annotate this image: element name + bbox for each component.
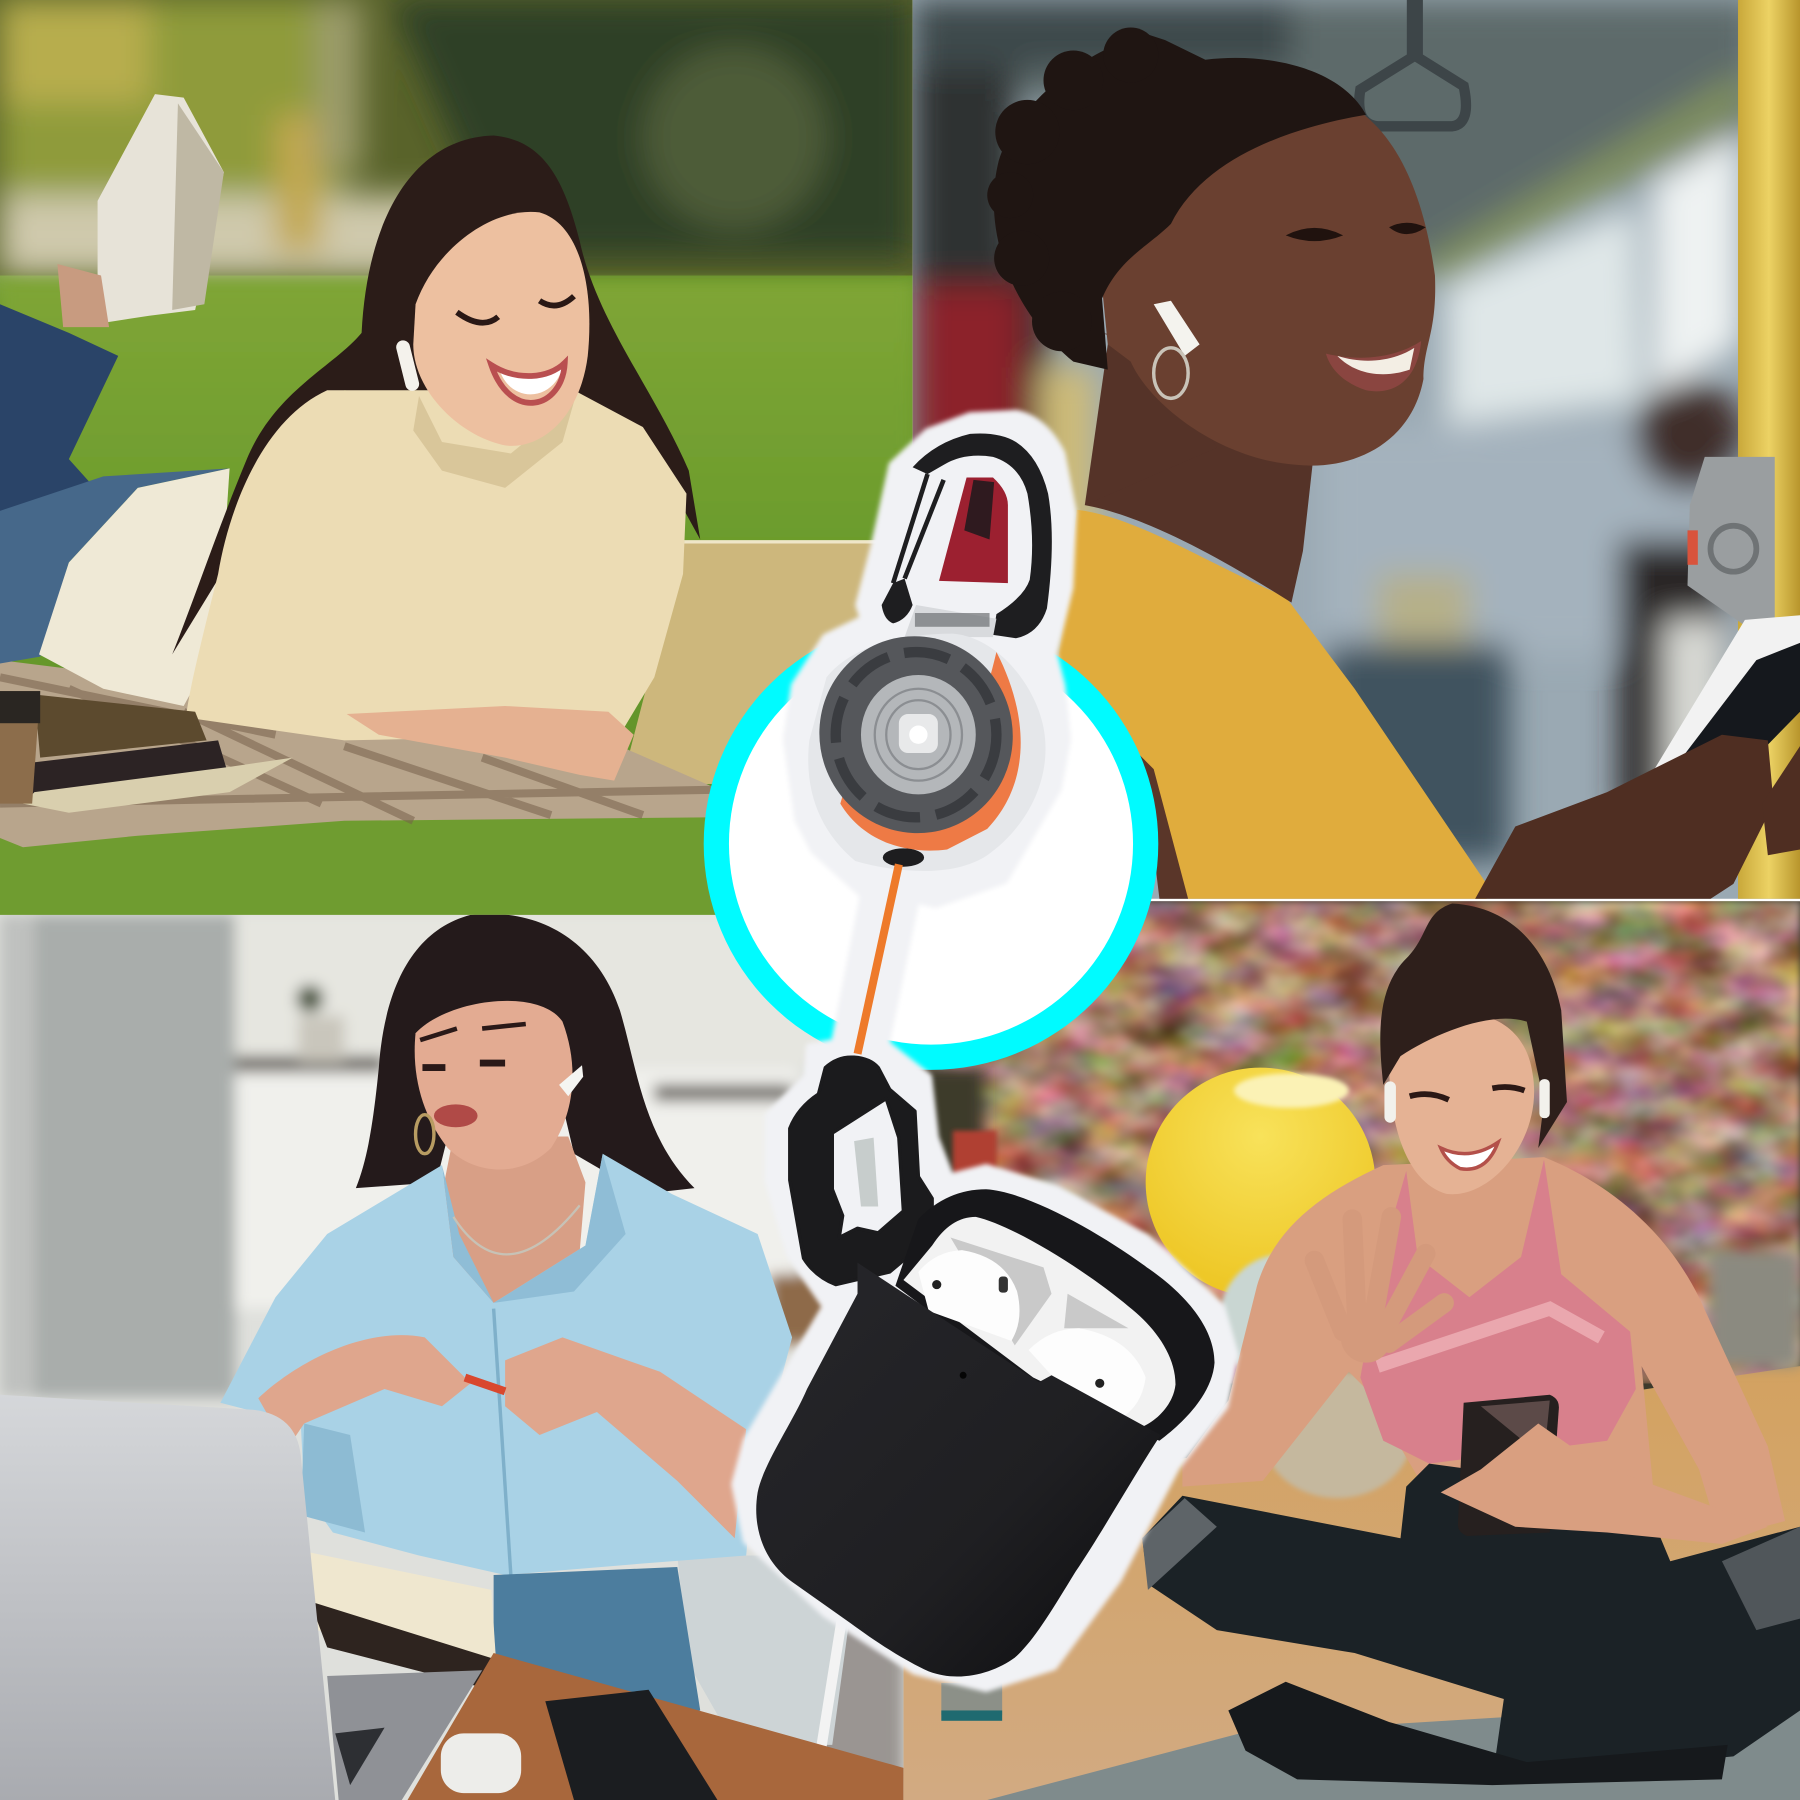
forearms and hands: [258, 1335, 470, 1436]
earbud right: [1029, 1328, 1146, 1415]
hand and phone: [1655, 615, 1800, 768]
laptop: [621, 542, 884, 785]
loop opening: [854, 1138, 878, 1207]
panel: woman in blue shirt at desk: [0, 914, 903, 1800]
blanket: [0, 660, 712, 847]
hair: [172, 135, 700, 654]
earbuds: [1384, 1081, 1396, 1123]
holding hand: [1441, 1423, 1768, 1544]
yellow top: [1056, 510, 1487, 899]
blue shirt: [220, 1154, 792, 1575]
yellow exercise ball: [1146, 1068, 1375, 1297]
neck and chest: [1085, 333, 1314, 603]
AirPods case: [756, 1189, 1215, 1677]
open notebook: [308, 1552, 496, 1659]
phone and earbuds case on table: [545, 1690, 717, 1800]
phone: [1458, 1395, 1559, 1536]
necklace: [453, 1205, 580, 1254]
white undershirt: [39, 468, 230, 706]
laptop: [0, 1395, 335, 1800]
waving hand: [1314, 1217, 1444, 1363]
carabiner: [882, 434, 1052, 638]
wooden floor: [903, 1366, 1800, 1800]
black body: [756, 1263, 1161, 1677]
table: [408, 1653, 903, 1800]
dark rim: [895, 1189, 1215, 1441]
earbud left: [918, 1250, 1020, 1341]
hair: [1380, 903, 1567, 1148]
sweater: [186, 390, 686, 740]
reel body: [792, 609, 1046, 871]
sneaker: [1228, 1682, 1728, 1785]
books and cup: [34, 695, 207, 758]
jeans: [0, 304, 118, 511]
neck: [442, 1136, 585, 1314]
earbud and hoop earring: [1154, 301, 1200, 356]
cord exit eyelet: [883, 848, 924, 867]
insert pockets: [951, 1238, 1052, 1345]
shoe: [98, 94, 224, 324]
white sticker outline: [735, 413, 1235, 1689]
panel: woman waving at phone in gym: [903, 901, 1800, 1800]
orange cord: [858, 864, 899, 1054]
grey exercise balls: [1219, 1254, 1352, 1387]
grab handle: [1359, 0, 1466, 126]
forearm and hand: [347, 706, 634, 781]
jeans: [494, 1567, 700, 1711]
clear tab: [905, 605, 996, 637]
chair: [677, 1555, 849, 1745]
face: [415, 1001, 573, 1169]
mat: [987, 1699, 1800, 1800]
black loop connector: [790, 1057, 932, 1285]
panel: woman lying on grass with laptop: [0, 0, 913, 915]
torso and arms: [1182, 1157, 1785, 1538]
hair: [356, 914, 695, 1194]
opening showing background: [939, 478, 1008, 583]
product: retractable tether with AirPods case: [735, 413, 1235, 1689]
face: [1102, 92, 1435, 466]
glass bottle: [941, 1683, 1002, 1715]
panel: woman smiling on a bus: [913, 0, 1800, 907]
face: [413, 212, 589, 446]
cyan circle with white centre: [704, 618, 1158, 1070]
face: [1389, 1014, 1534, 1194]
white insert: [903, 1217, 1176, 1428]
hair: [987, 28, 1366, 370]
pole and bracket: [1738, 0, 1800, 899]
pink sports top: [1360, 1159, 1636, 1464]
leggings: [1142, 1464, 1800, 1779]
graffiti wall: [918, 901, 1800, 1383]
